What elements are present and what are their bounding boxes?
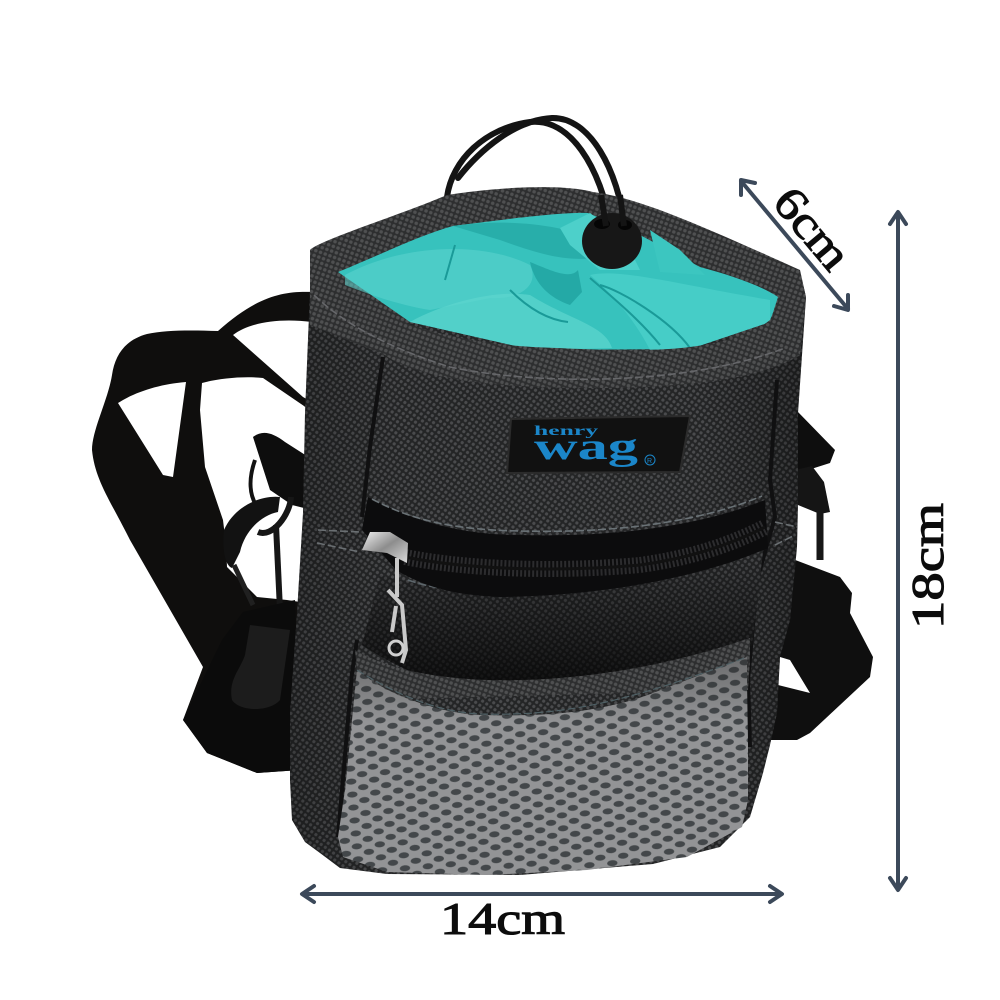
bag rim front (310, 250, 806, 388)
zipper pull (362, 532, 408, 663)
side seams (338, 357, 777, 837)
label: 18cm: 18cm (902, 503, 953, 629)
mesh pocket (338, 638, 750, 875)
arrow: width (302, 886, 782, 902)
brand label (507, 416, 690, 473)
bag body (290, 250, 806, 875)
drawstring cords (447, 118, 625, 232)
zipper (362, 496, 768, 597)
pocket lip (355, 638, 750, 700)
side shading (290, 250, 806, 875)
left shoulder strap (92, 290, 320, 773)
cord bead (582, 195, 642, 269)
label: 14cm: 14cm (440, 893, 565, 944)
arrow: depth (741, 180, 848, 310)
bag rim back (310, 187, 806, 340)
left clip hardware (183, 433, 320, 773)
brand label: R (647, 458, 652, 465)
label: 6cm: 6cm (763, 177, 862, 280)
side stitching (317, 522, 797, 552)
teal drawstring liner (338, 213, 778, 350)
arrow: height (890, 212, 906, 890)
brand label: henry (534, 424, 598, 439)
mesh panel (338, 657, 748, 875)
brand label: wag (534, 426, 638, 468)
right strap and clip (765, 405, 873, 740)
lower zip pocket (362, 535, 765, 690)
